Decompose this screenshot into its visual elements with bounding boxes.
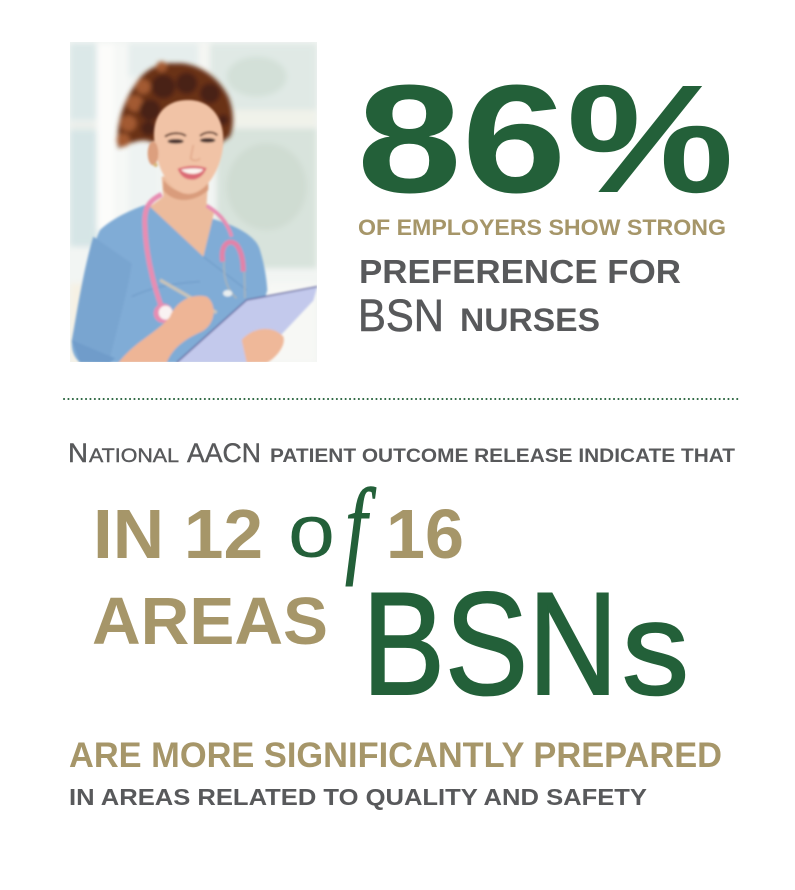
- intro sentence: National AACN patient outcome release: AACN: [187, 438, 261, 468]
- big statement: areas: AREAS: [92, 584, 328, 659]
- big statement: in 12 of 16: o: [288, 490, 335, 573]
- headline stat: 86%: 86%: [357, 53, 734, 225]
- scrubs: [72, 205, 267, 363]
- closing line: are more significantly prepared: ARE MORE SIGNIFICANTLY PREPARED: [69, 736, 722, 775]
- big statement: in 12 of 16: f: [345, 468, 377, 587]
- clipboard: [177, 287, 317, 363]
- big statement: in 12 of 16: 16: [386, 495, 464, 573]
- stethoscope: [145, 194, 162, 305]
- big statement: in 12 of 16: [93, 468, 464, 587]
- big statement: BSNs: s: [622, 575, 689, 722]
- pen and writing hand: [160, 280, 217, 313]
- holding hand: [242, 329, 284, 363]
- subheading: preference for BSN nurses: BSN: [358, 290, 444, 341]
- photo: smiling nurse with stethoscope and clipboard: [70, 42, 317, 363]
- intro sentence: National AACN patient outcome release: ATIONAL: [89, 445, 179, 467]
- subheading: of employers show strong: OF EMPLOYERS SHOW STRONG: [358, 215, 726, 240]
- closing line: in areas related to quality and safety: IN AREAS RELATED TO QUALITY AND SAFETY: [69, 784, 647, 810]
- face: [154, 100, 223, 194]
- intro sentence: National AACN patient outcome release: PATIENT OUTCOME RELEASE INDICATE THAT: [270, 445, 735, 467]
- smile: [178, 166, 207, 180]
- eyes and brows: [165, 133, 186, 137]
- dotted divider: [64, 398, 740, 400]
- intro sentence: National AACN patient outcome release: [68, 438, 735, 468]
- intro sentence: National AACN patient outcome release: N: [68, 438, 88, 468]
- neck and chest: [150, 177, 214, 257]
- hair curls: [117, 61, 233, 148]
- big statement: BSNs: BSN: [362, 562, 618, 725]
- subheading: preference for BSN nurses: [358, 254, 681, 341]
- subheading: preference for BSN nurses: PREFERENCE FOR: [359, 254, 681, 291]
- subheading: preference for BSN nurses: NURSES: [460, 302, 600, 338]
- big statement: in 12 of 16: IN 12: [93, 495, 263, 573]
